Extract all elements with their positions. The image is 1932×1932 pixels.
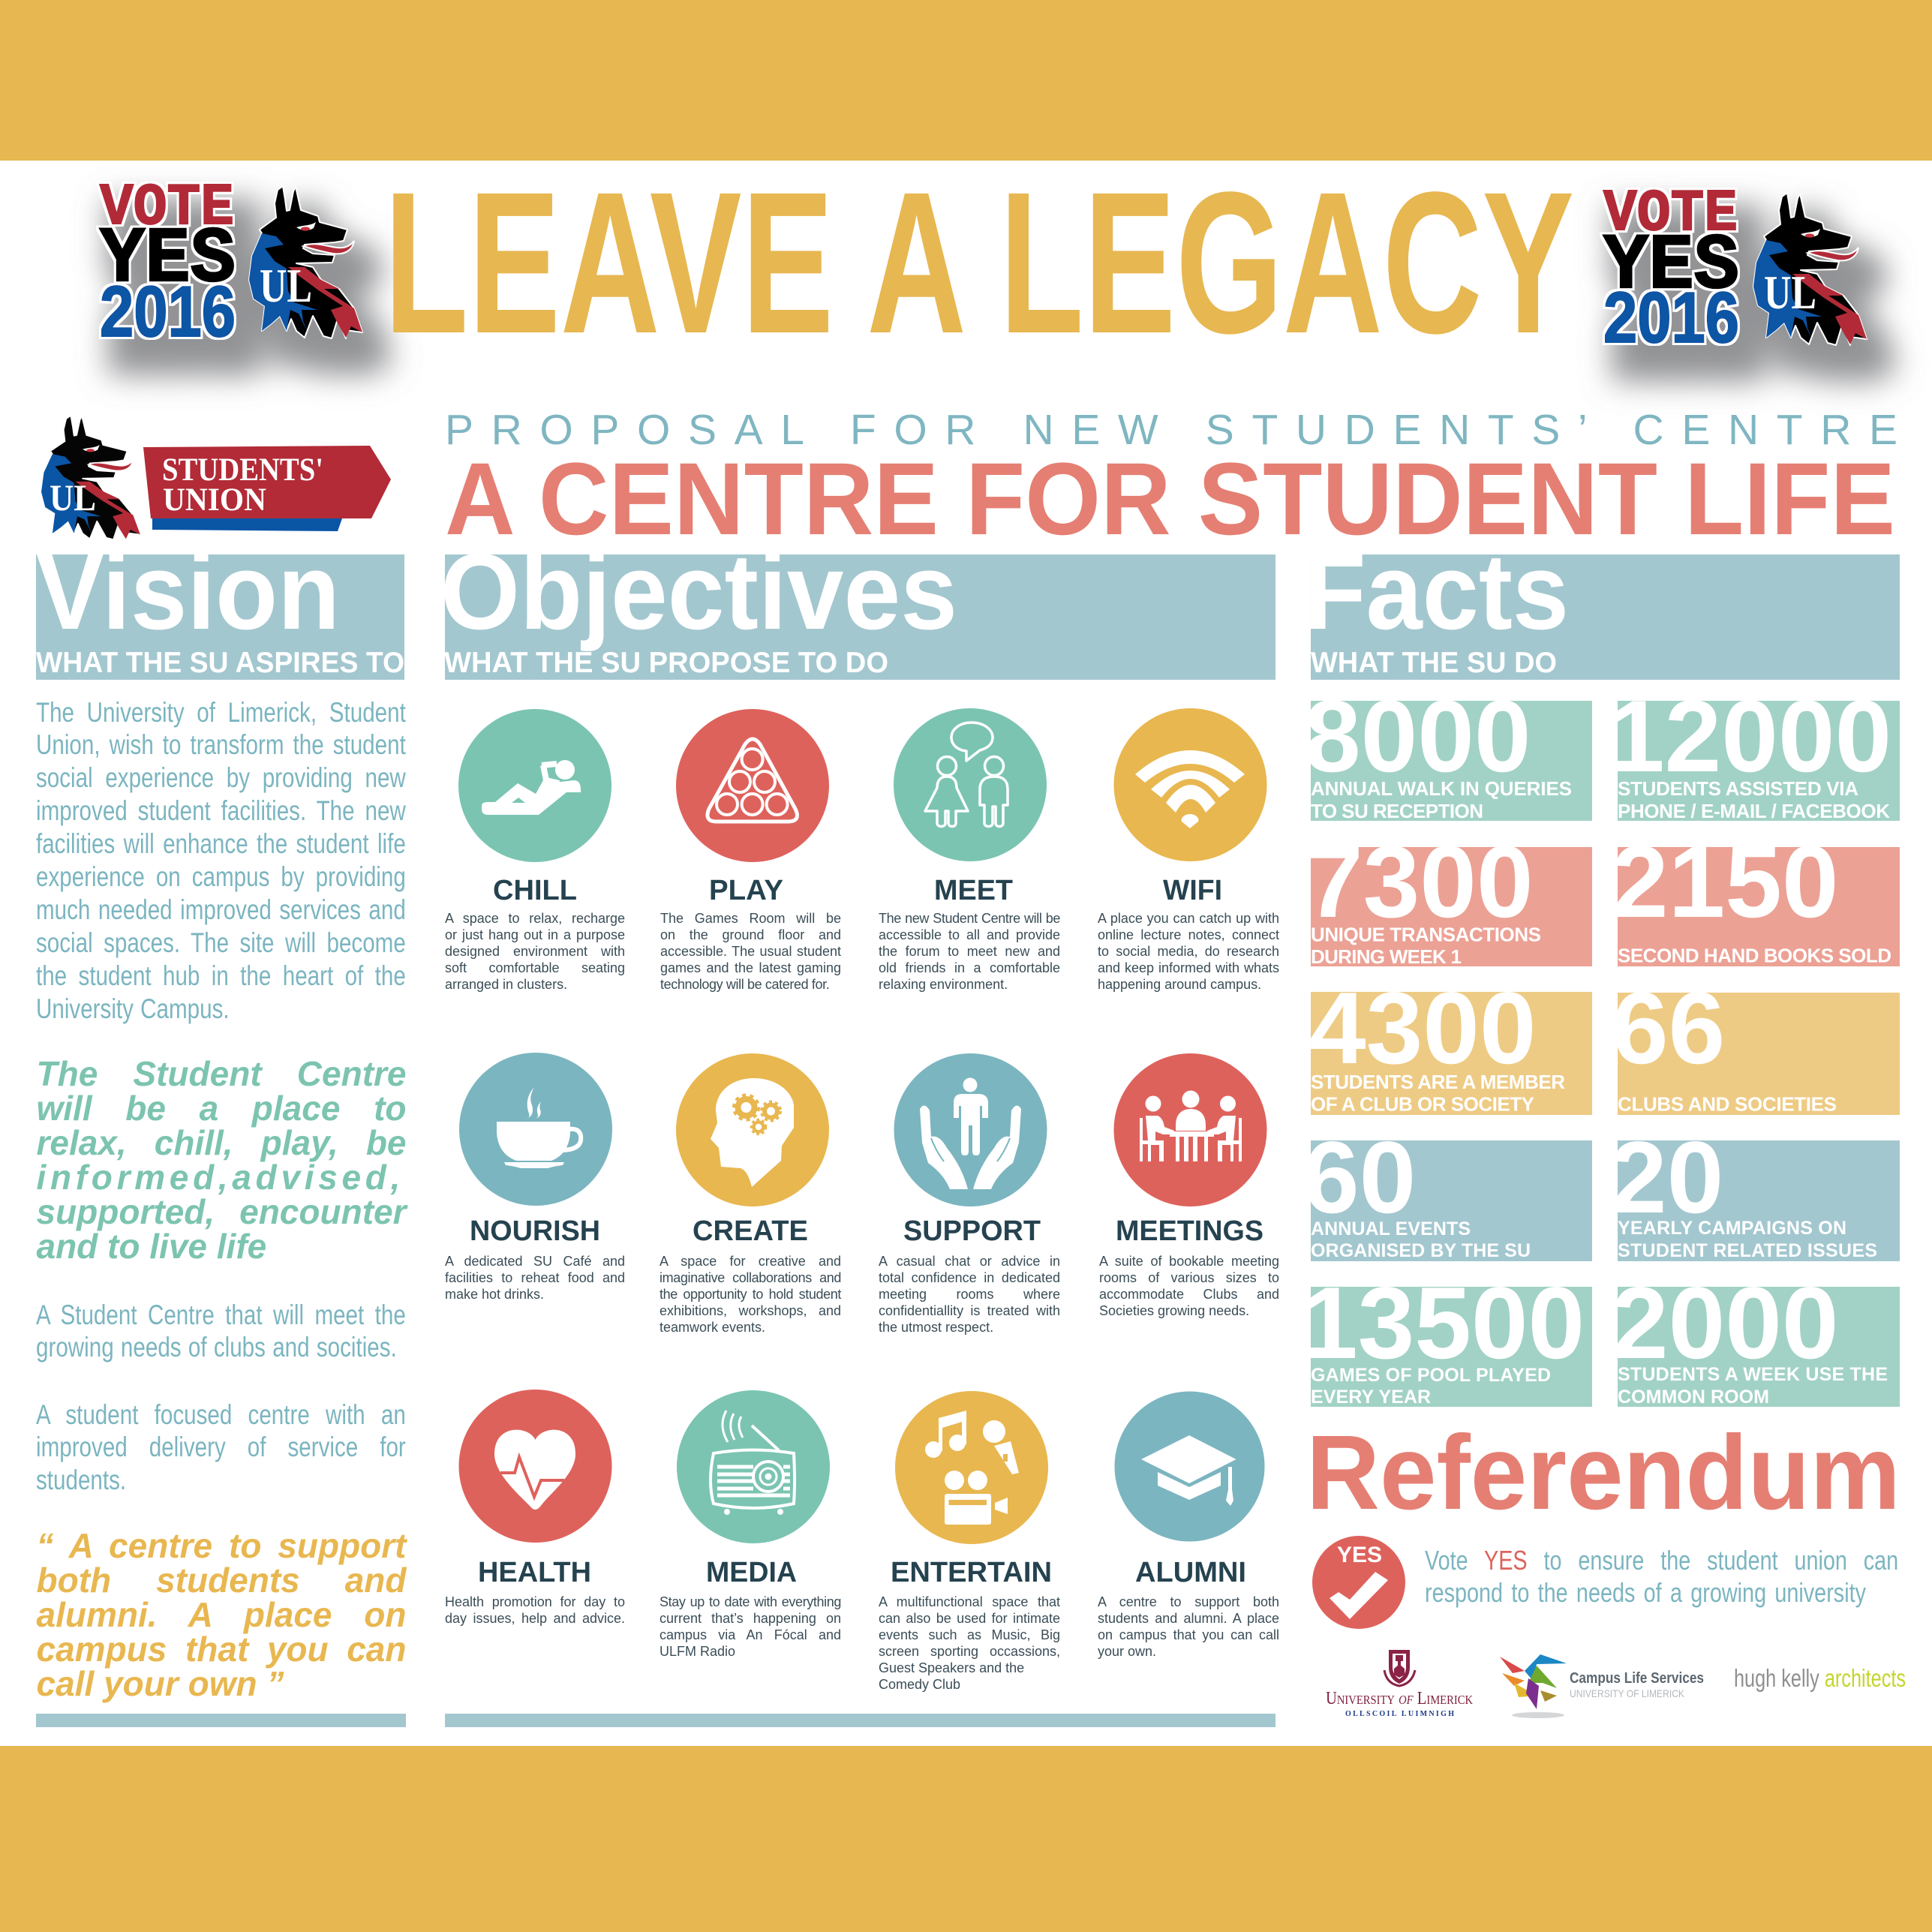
icon: alumni <box>1115 1391 1265 1541</box>
label: health: HEALTH <box>478 1557 591 1588</box>
stat: 12000: STUDENTS ASSISTED VIA <box>1618 777 1858 800</box>
stat: 13500: 13500 <box>1301 1266 1585 1380</box>
text: vision paragraph: the student hub in the heart of the <box>36 960 406 991</box>
text: entertain description: Comedy Club <box>879 1677 960 1692</box>
top band <box>0 0 1932 161</box>
text: nourish description: facilities to reheat food and <box>445 1269 625 1284</box>
text: health description: Health promotion for day to <box>445 1594 625 1609</box>
stat: 2150 <box>1612 825 1900 966</box>
text: meetings description <box>1099 1253 1279 1318</box>
text: student centre statement: supported, encounter <box>36 1192 407 1231</box>
label: meet: MEET <box>934 875 1013 906</box>
text: meet description: The new Student Centre will be <box>879 911 1060 926</box>
text: vision paragraph: much needed improved services and <box>36 894 406 925</box>
stat: 7300: UNIQUE TRANSACTIONS <box>1311 923 1541 945</box>
bottom band <box>0 1746 1932 1932</box>
logo: vote yes 2016 right: 2016 <box>1603 278 1739 358</box>
text: gold quote: alumni. A place on <box>36 1595 407 1634</box>
text: vision paragraph: University Campus. <box>36 993 230 1024</box>
label: meetings: MEETINGS <box>1116 1215 1263 1247</box>
label: chill: CHILL <box>493 875 577 906</box>
stat: 20: YEARLY CAMPAIGNS ON <box>1618 1218 1846 1239</box>
text: gold quote: call your own ” <box>36 1664 284 1703</box>
text: clubs and societies paragraph: growing needs of clubs and socities. <box>36 1332 397 1363</box>
text: student centre statement <box>36 1054 408 1266</box>
stat: 60: ANNUAL EVENTS <box>1311 1218 1471 1239</box>
text: play description: games and the latest gaming <box>660 960 841 975</box>
icon: support <box>894 1053 1047 1206</box>
stat: 66 <box>1612 971 1900 1115</box>
logo: university of limerick: OLLSCOIL LUIMNIGH <box>1345 1710 1454 1718</box>
heading: facts <box>1304 531 1900 680</box>
icon: meet <box>894 708 1047 861</box>
label: create: CREATE <box>693 1215 808 1247</box>
text: student centre statement: informed,advised, <box>36 1158 404 1197</box>
text: support description <box>879 1253 1060 1335</box>
text: chill description <box>445 911 625 992</box>
bottom bar: vision <box>36 1714 406 1727</box>
stat: 2000: STUDENTS A WEEK USE THE <box>1618 1364 1888 1385</box>
bottom bar: objectives <box>445 1714 1275 1727</box>
text: entertain description: can also be used for intimate <box>879 1611 1060 1626</box>
text: nourish description <box>445 1253 625 1301</box>
stat: 2000: COMMON ROOM <box>1618 1387 1769 1408</box>
text: entertain description: A multifunctional space that <box>879 1594 1060 1609</box>
logo: university of limerick: University of Limerick <box>1326 1689 1474 1708</box>
text: service paragraph: students. <box>36 1465 126 1495</box>
text: chill description: designed environment with <box>445 944 625 959</box>
logo: vote yes 2016 right <box>1603 180 1867 358</box>
icon: wifi <box>1113 708 1266 861</box>
text: vision paragraph: experience on campus by providing <box>36 861 406 892</box>
text: create description: exhibitions, workshops, and <box>660 1303 841 1318</box>
text: alumni description: students and alumni. A place <box>1098 1611 1279 1626</box>
label: nourish: NOURISH <box>470 1215 600 1247</box>
stat: 4300: 4300 <box>1309 971 1537 1085</box>
text: alumni description: A centre to support both <box>1098 1594 1279 1609</box>
stat: 66: 66 <box>1612 971 1725 1085</box>
heading: vision: Vision <box>36 531 340 652</box>
stat: 66: CLUBS AND SOCIETIES <box>1618 1092 1837 1115</box>
logo: students' union <box>41 416 391 539</box>
text: support description: the utmost respect. <box>879 1319 993 1334</box>
stat: 60: 60 <box>1303 1120 1416 1234</box>
text: entertain description: Guest Speakers and the <box>879 1660 1024 1675</box>
stat: 20: 20 <box>1610 1120 1723 1234</box>
icon: yes check: YES <box>1337 1543 1382 1567</box>
text: alumni description <box>1098 1594 1279 1659</box>
text: vision paragraph <box>36 696 406 1024</box>
text: health description: day issues, help and advice. <box>445 1611 625 1626</box>
text: support description: meeting rooms where <box>879 1286 1060 1301</box>
stat: 2150: SECOND HAND BOOKS SOLD <box>1618 944 1891 966</box>
text: gold quote <box>36 1526 407 1703</box>
text: health description <box>445 1594 625 1626</box>
stat: 4300 <box>1309 971 1592 1115</box>
logo: campus life services <box>1500 1654 1704 1718</box>
icon: health <box>459 1390 612 1543</box>
stat: 13500: EVERY YEAR <box>1311 1387 1431 1408</box>
stat: 20 <box>1610 1120 1900 1261</box>
text: meetings description: Societies growing needs. <box>1099 1303 1249 1318</box>
text: play description <box>660 911 841 992</box>
text: nourish description: make hot drinks. <box>445 1286 544 1301</box>
text: student centre statement: relax, chill, play, be <box>36 1123 407 1162</box>
logo: vote yes 2016 right: VOTE <box>1603 180 1738 248</box>
text: create description: teamwork events. <box>660 1319 765 1334</box>
text: play description: on the ground floor and <box>660 927 841 942</box>
text: meet description: accessible to all and provide <box>879 927 1060 942</box>
logo: students' union: UL <box>50 476 96 518</box>
text: chill description: arranged in clusters. <box>445 977 567 992</box>
heading: facts: Facts <box>1304 531 1569 652</box>
text: create description: the opportunity to hold student <box>660 1286 841 1301</box>
stat: 60 <box>1303 1120 1592 1261</box>
text: media description: Stay up to date with everything <box>660 1594 841 1609</box>
logo: students' union: STUDENTS' <box>162 452 323 488</box>
logo: vote yes 2016 left: 2016 <box>100 272 236 352</box>
text: vision paragraph: social spaces. The site will become <box>36 927 406 958</box>
text: meet description <box>879 911 1060 992</box>
text: wifi description <box>1098 911 1279 992</box>
icon: entertain <box>895 1391 1048 1544</box>
text: create description: imaginative collaborations and <box>660 1269 841 1284</box>
text: entertain description: events such as Music, Big <box>879 1627 1060 1642</box>
logo: vote yes 2016 right: YES <box>1603 222 1739 311</box>
icon: meetings <box>1113 1053 1266 1206</box>
text: gold quote: campus that you can <box>36 1630 407 1669</box>
stat: 7300: 7300 <box>1306 825 1534 939</box>
text: support description: A casual chat or advice in <box>879 1253 1060 1268</box>
stat: 60: ORGANISED BY THE SU <box>1311 1240 1531 1261</box>
logo: vote yes 2016 right: UL <box>1764 266 1816 319</box>
text: chill description: or just hang out in a purpose <box>445 927 625 942</box>
text: play description: accessible. The usual student <box>660 944 841 959</box>
text: vote yes message <box>1425 1545 1898 1608</box>
logo: vote yes 2016 left: UL <box>260 259 312 312</box>
label: media: MEDIA <box>706 1557 797 1588</box>
stat: 12000: 12000 <box>1608 679 1891 793</box>
text: service paragraph: improved delivery of service for <box>36 1432 406 1462</box>
icon: create <box>676 1053 829 1206</box>
logo: university of limerick <box>1326 1650 1474 1718</box>
label: entertain: ENTERTAIN <box>891 1557 1052 1588</box>
text: vote yes message: respond to the needs of a growing university <box>1425 1577 1866 1608</box>
logo: campus life services: Campus Life Services <box>1570 1670 1704 1687</box>
heading: objectives: WHAT THE SU PROPOSE TO DO <box>444 647 888 679</box>
text: service paragraph: A student focused centre with an <box>36 1399 406 1430</box>
stat: 20: STUDENT RELATED ISSUES <box>1618 1240 1877 1261</box>
text: wifi description: to social media, do research <box>1098 944 1279 959</box>
heading: vision: WHAT THE SU ASPIRES TO <box>36 647 404 679</box>
text: create description: A space for creative and <box>660 1253 841 1268</box>
heading: facts: WHAT THE SU DO <box>1311 647 1557 679</box>
text: meet description: relaxing environment. <box>879 977 1008 992</box>
text: wifi description: and keep informed with whats <box>1098 960 1279 975</box>
text: meet description: old friends in a comfortable <box>879 960 1060 975</box>
logo: campus life services: UNIVERSITY OF LIMERICK <box>1570 1687 1685 1699</box>
stat: 2150: 2150 <box>1612 825 1839 939</box>
heading: referendum: Referendum <box>1306 1413 1900 1531</box>
stat: 13500: GAMES OF POOL PLAYED <box>1311 1365 1551 1386</box>
icon: nourish <box>459 1053 612 1206</box>
stat: 8000: TO SU RECEPTION <box>1311 800 1483 822</box>
text: student centre statement: will be a place to <box>36 1089 407 1128</box>
stat: 7300: DURING WEEK 1 <box>1311 945 1462 968</box>
text: vision paragraph: improved student facilities. The new <box>36 795 406 826</box>
text: media description <box>660 1594 841 1659</box>
label: play: PLAY <box>709 875 783 906</box>
text: chill description: A space to relax, recharge <box>445 911 625 926</box>
stat: 4300: STUDENTS ARE A MEMBER <box>1311 1071 1565 1093</box>
logo: vote yes 2016 left <box>100 174 362 352</box>
stat: 4300: OF A CLUB OR SOCIETY <box>1311 1092 1534 1115</box>
text: entertain description <box>879 1594 1060 1692</box>
text: wifi description: online lecture notes, connect <box>1098 927 1279 942</box>
stat: 12000: PHONE / E-MAIL / FACEBOOK <box>1618 800 1890 822</box>
text: clubs and societies paragraph: A Student Centre that will meet the <box>36 1300 406 1330</box>
logo: students' union: UNION <box>163 482 266 518</box>
text: clubs and societies paragraph <box>36 1300 406 1363</box>
label: wifi: WIFI <box>1163 875 1222 906</box>
text: media description: current that’s happening on <box>660 1611 841 1626</box>
stat: 8000: 8000 <box>1304 679 1531 793</box>
icon: yes check <box>1312 1536 1405 1629</box>
text: play description: technology will be catered for. <box>660 977 829 992</box>
stat: 2000 <box>1612 1266 1900 1408</box>
text: meetings description: A suite of bookable meeting <box>1099 1253 1279 1268</box>
text: gold quote: “ A centre to support <box>36 1526 407 1565</box>
text: meetings description: rooms of various sizes to <box>1099 1269 1279 1284</box>
text: play description: The Games Room will be <box>660 911 841 926</box>
logo: hugh kelly architects: hugh kelly architects <box>1734 1664 1906 1692</box>
text: media description: ULFM Radio <box>660 1644 735 1659</box>
stat: 8000 <box>1304 679 1592 822</box>
text: student centre statement: and to live life <box>36 1227 266 1266</box>
icon: play <box>676 709 829 862</box>
icon: media <box>677 1390 830 1543</box>
text: vision paragraph: Union, wish to transform the student <box>36 729 406 760</box>
text: gold quote: both students and <box>36 1561 407 1600</box>
text: alumni description: on campus that you can call <box>1098 1627 1279 1642</box>
heading: objectives <box>440 531 1275 680</box>
logo: vote yes 2016 left: YES <box>100 215 236 305</box>
stat: 2000: 2000 <box>1612 1266 1839 1380</box>
text: media description: campus via An Fócal and <box>660 1627 841 1642</box>
stat: 7300 <box>1306 825 1592 968</box>
text: service paragraph <box>36 1399 406 1495</box>
label: alumni: ALUMNI <box>1135 1557 1246 1588</box>
text: wifi description: A place you can catch up with <box>1098 911 1279 926</box>
text: entertain description: screen sporting occassions, <box>879 1644 1060 1659</box>
text: wifi description: happening around campus. <box>1098 977 1261 992</box>
text: chill description: soft comfortable seating <box>445 960 625 975</box>
text: nourish description: A dedicated SU Café and <box>445 1253 625 1268</box>
text: support description: confidentiallity is treated with <box>879 1303 1060 1318</box>
subtitle: proposal: PROPOSAL FOR NEW STUDENTS’ CENTRE <box>445 406 1897 454</box>
label: support: SUPPORT <box>903 1215 1041 1247</box>
text: meet description: the forum to meet new and <box>879 944 1060 959</box>
text: alumni description: your own. <box>1098 1644 1156 1659</box>
text: create description <box>660 1253 842 1334</box>
icon: chill <box>458 709 611 862</box>
text: meetings description: accommodate Clubs and <box>1099 1286 1279 1301</box>
text: vision paragraph: social experience by providing new <box>36 762 406 793</box>
text: vision paragraph: facilities will enhance the student life <box>36 828 406 859</box>
text: vote yes message: Vote YES to ensure the student union can <box>1425 1545 1898 1576</box>
text: vision paragraph: The University of Limerick, Student <box>36 696 406 728</box>
stat: 8000: ANNUAL WALK IN QUERIES <box>1311 777 1572 800</box>
headline: a centre for student life: A CENTRE FOR STUDENT LIFE <box>445 442 1895 557</box>
text: support description: total confidence in dedicated <box>879 1269 1060 1284</box>
logo: vote yes 2016 left: VOTE <box>100 174 234 242</box>
text: student centre statement: The Student Centre <box>36 1054 407 1093</box>
heading: objectives: Objectives <box>440 531 957 652</box>
